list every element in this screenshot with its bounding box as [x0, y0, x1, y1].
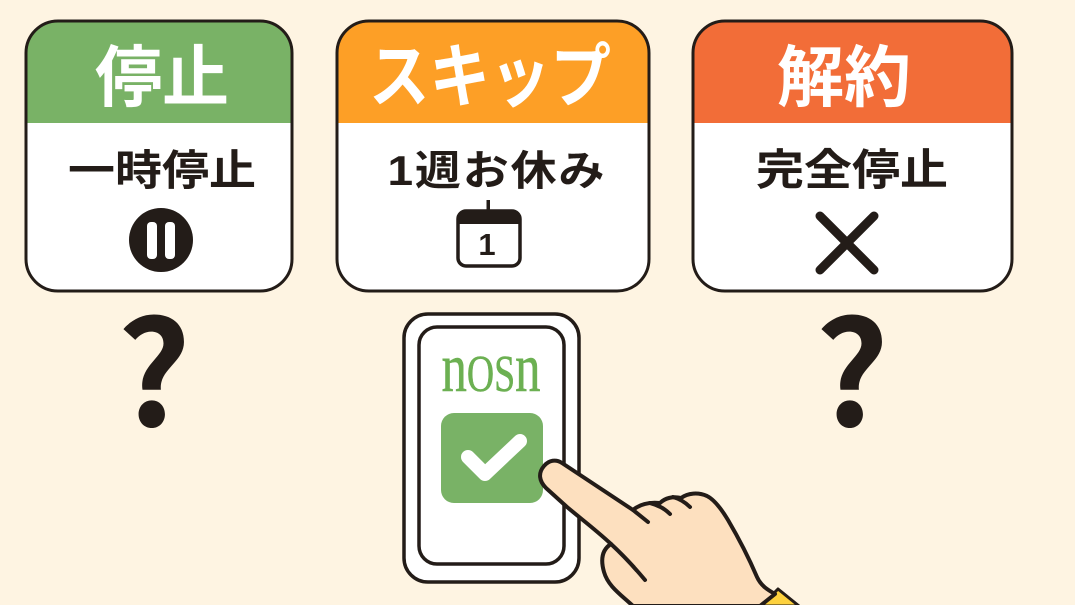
icon: calendar [458, 200, 520, 266]
icon: pause [129, 208, 193, 272]
phone [404, 314, 579, 582]
panel: stop card [26, 21, 292, 291]
left question mark: ? [117, 260, 191, 468]
skip header band [337, 21, 649, 123]
hand shape [540, 461, 775, 605]
cancel heading: 解約 [777, 41, 911, 116]
cancel header band [693, 21, 1012, 123]
hand pointing [540, 461, 799, 605]
stop header band [26, 21, 292, 123]
logo: nOSn [442, 330, 540, 407]
stop subtitle: 一時停止 [68, 148, 256, 194]
cancel subtitle: 完全停止 [756, 146, 948, 194]
icon: cross [820, 216, 874, 270]
icon: calendar: 1 [478, 227, 496, 262]
panel: skip card [337, 21, 649, 291]
stop heading: 停止 [95, 41, 229, 116]
right question mark: ? [815, 260, 889, 468]
finger crease lines [611, 497, 690, 580]
sleeve cuff [761, 589, 799, 605]
panel: cancel card [693, 21, 1012, 291]
check button [441, 413, 543, 503]
skip subtitle: 1週お休み [388, 148, 604, 194]
skip heading: スキップ [369, 38, 611, 116]
